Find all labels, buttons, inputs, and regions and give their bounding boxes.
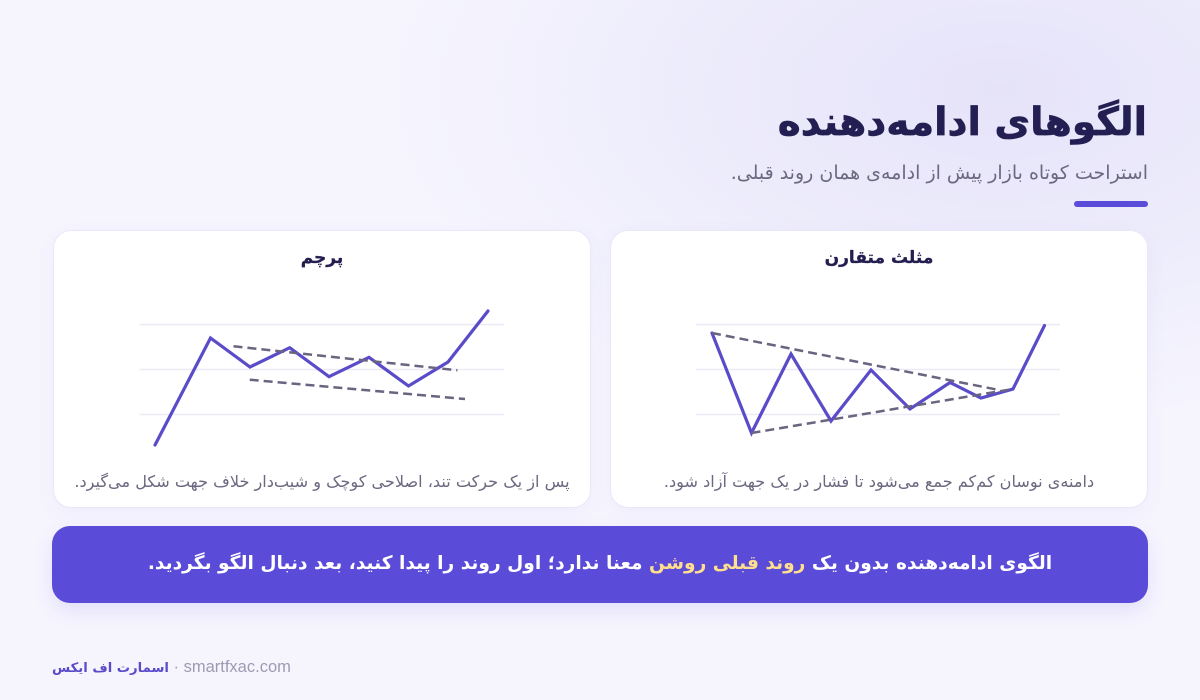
callout banner: الگوی ادامه‌دهنده بدون یک روند قبلی روشن معنا ندارد؛ اول روند را پیدا کنید، بعد دنبال الگو بگردید. [148, 553, 1052, 574]
callout banner [52, 526, 1148, 603]
subtitle: استراحت کوتاه بازار پیش از ادامه‌ی همان روند قبلی. [731, 162, 1148, 184]
accent underline [1074, 201, 1148, 207]
chart: flag pattern [140, 309, 504, 447]
panel description: flag: پس از یک حرکت تند، اصلاحی کوچک و شیب‌دار خلاف جهت شکل می‌گیرد. [74, 472, 570, 491]
footer brand: اسمارت اف ایکس · smartfxac.com [52, 658, 291, 676]
panel heading: triangle: مثلث متقارن [825, 248, 933, 268]
chart: triangle pattern [696, 324, 1060, 437]
panel description: triangle: دامنه‌ی نوسان کم‌کم جمع می‌شود تا فشار در یک جهت آزاد شود. [664, 472, 1094, 491]
panel: flag [53, 230, 591, 508]
panel heading: flag: پرچم [301, 248, 343, 268]
title: الگوهای ادامه‌دهنده [778, 100, 1147, 145]
panel: symmetrical triangle [610, 230, 1148, 508]
